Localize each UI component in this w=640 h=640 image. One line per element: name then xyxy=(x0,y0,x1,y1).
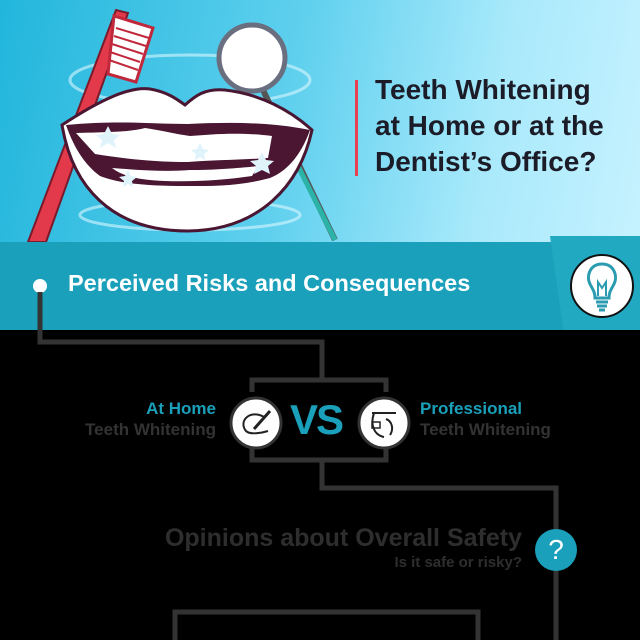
icon: question: ? xyxy=(548,534,564,565)
header background xyxy=(0,0,640,245)
comparison: professional xyxy=(420,399,551,439)
comparison: at home xyxy=(85,399,216,439)
title: Dentist’s Office? xyxy=(375,146,596,177)
lips xyxy=(62,89,312,231)
comparison: professional: Professional xyxy=(420,399,522,418)
icon: home kit xyxy=(230,396,282,450)
illustration: lips toothbrush mirror xyxy=(27,8,338,242)
VS: VS xyxy=(290,396,342,443)
title xyxy=(355,74,604,177)
band: section heading: Perceived Risks and Consequences xyxy=(68,270,470,296)
comparison: at home: At Home xyxy=(146,399,216,418)
icon: lightbulb xyxy=(570,254,634,318)
comparison: professional: Teeth Whitening xyxy=(420,420,551,439)
title: Teeth Whitening xyxy=(375,74,591,105)
mirror xyxy=(219,25,335,240)
heading: overall safety: Opinions about Overall Safety xyxy=(165,524,522,552)
band: section heading xyxy=(0,242,640,330)
toothbrush xyxy=(28,10,153,242)
comparison: at home: Teeth Whitening xyxy=(85,420,216,439)
title: at Home or at the xyxy=(375,110,604,141)
icon: question xyxy=(535,529,577,571)
icon: dentist xyxy=(358,396,410,450)
heading: overall safety xyxy=(165,524,522,571)
heading: overall safety: Is it safe or risky? xyxy=(394,554,522,571)
